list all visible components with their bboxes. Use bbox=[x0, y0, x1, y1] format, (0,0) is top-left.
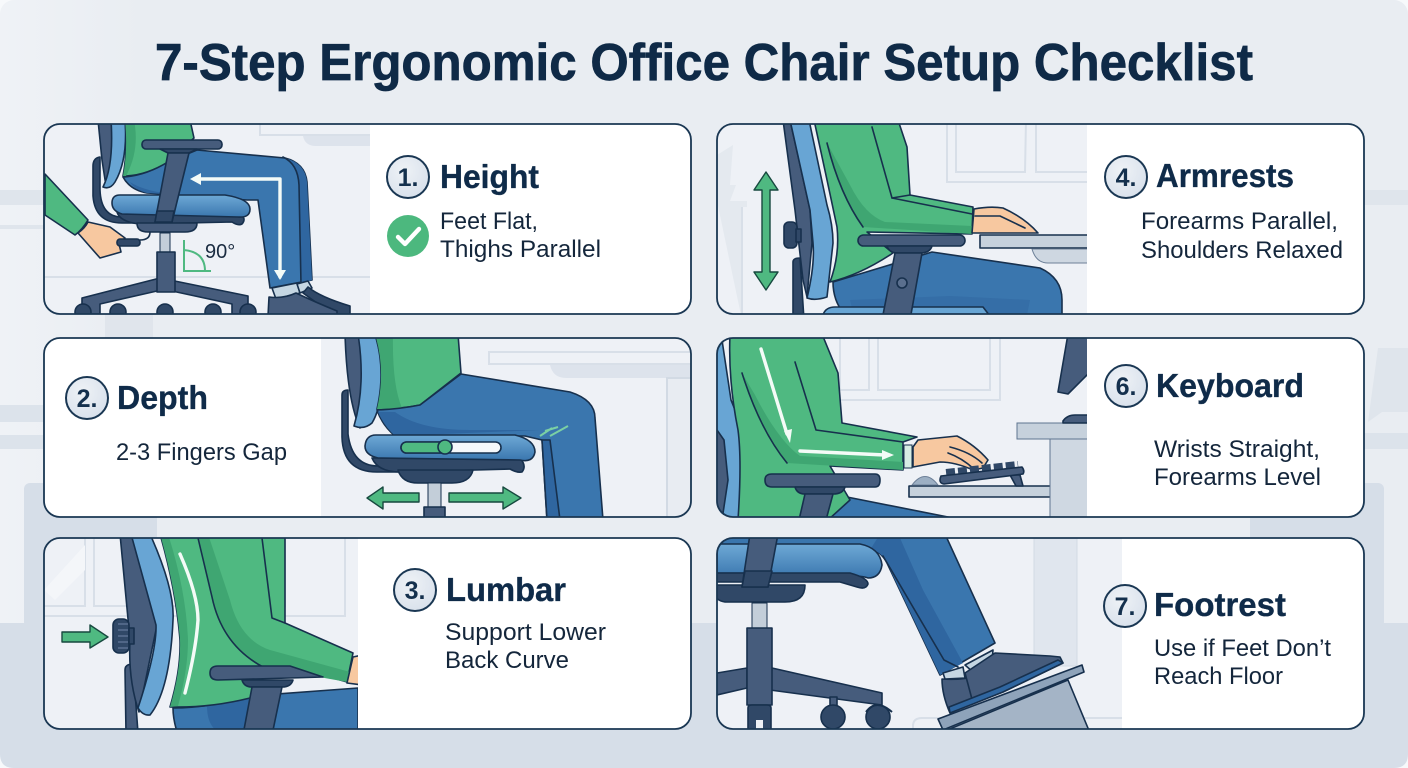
illustration: seat depth slider bbox=[321, 334, 699, 523]
text: keyboard instruction: Forearms Level bbox=[1154, 464, 1321, 491]
heading: keyboard: 6. bbox=[1116, 373, 1136, 401]
illustration: seated height adjustment bbox=[44, 120, 375, 320]
text: height instruction: Feet Flat, bbox=[440, 208, 538, 235]
panel: step 6 keyboard bbox=[710, 334, 1364, 521]
text: armrests instruction: Shoulders Relaxed bbox=[1141, 237, 1343, 264]
heading: height bbox=[387, 156, 539, 198]
illustration: footrest bbox=[712, 534, 1122, 735]
heading: footrest: Footrest bbox=[1154, 586, 1286, 623]
illustration: armrest height bbox=[717, 120, 1092, 320]
title: 7-Step Ergonomic Office Chair Setup Checklist bbox=[155, 34, 1253, 92]
text: footrest instruction: Reach Floor bbox=[1154, 663, 1283, 690]
heading: height: 1. bbox=[398, 164, 418, 192]
text: keyboard instruction: Wrists Straight, bbox=[1154, 436, 1320, 463]
text: lumbar instruction: Back Curve bbox=[445, 647, 569, 674]
heading: footrest: 7. bbox=[1115, 593, 1135, 621]
text: lumbar instruction: Support Lower bbox=[445, 619, 606, 646]
panel: step 2 depth bbox=[44, 334, 699, 523]
heading: footrest bbox=[1104, 585, 1286, 627]
heading: lumbar: 3. bbox=[405, 577, 425, 605]
heading: height: Height bbox=[440, 158, 539, 195]
heading: depth: 2. bbox=[77, 385, 97, 413]
panel: step 4 armrests bbox=[717, 120, 1364, 320]
illustration: seated height adjustment: 90° bbox=[205, 241, 235, 263]
panel: step 3 lumbar bbox=[44, 534, 691, 735]
heading: lumbar bbox=[394, 569, 566, 611]
heading: keyboard: Keyboard bbox=[1156, 367, 1304, 404]
heading: depth bbox=[66, 377, 208, 419]
panel: step 7 footrest bbox=[712, 534, 1364, 735]
illustration: lumbar support bbox=[44, 534, 362, 735]
heading: armrests bbox=[1105, 156, 1294, 198]
illustration: keyboard position bbox=[710, 334, 1093, 521]
text: armrests instruction: Forearms Parallel, bbox=[1141, 208, 1338, 235]
heading: armrests: 4. bbox=[1116, 164, 1136, 192]
panel: step 1 height bbox=[44, 120, 691, 320]
heading: armrests: Armrests bbox=[1156, 157, 1294, 194]
heading: keyboard bbox=[1105, 365, 1304, 407]
icon: check mark bbox=[387, 215, 429, 257]
text: height instruction: Thighs Parallel bbox=[440, 236, 601, 263]
heading: depth: Depth bbox=[117, 379, 208, 416]
text: footrest instruction: Use if Feet Don’t bbox=[1154, 635, 1331, 662]
text: depth instruction: 2-3 Fingers Gap bbox=[116, 439, 287, 466]
heading: lumbar: Lumbar bbox=[446, 571, 566, 608]
